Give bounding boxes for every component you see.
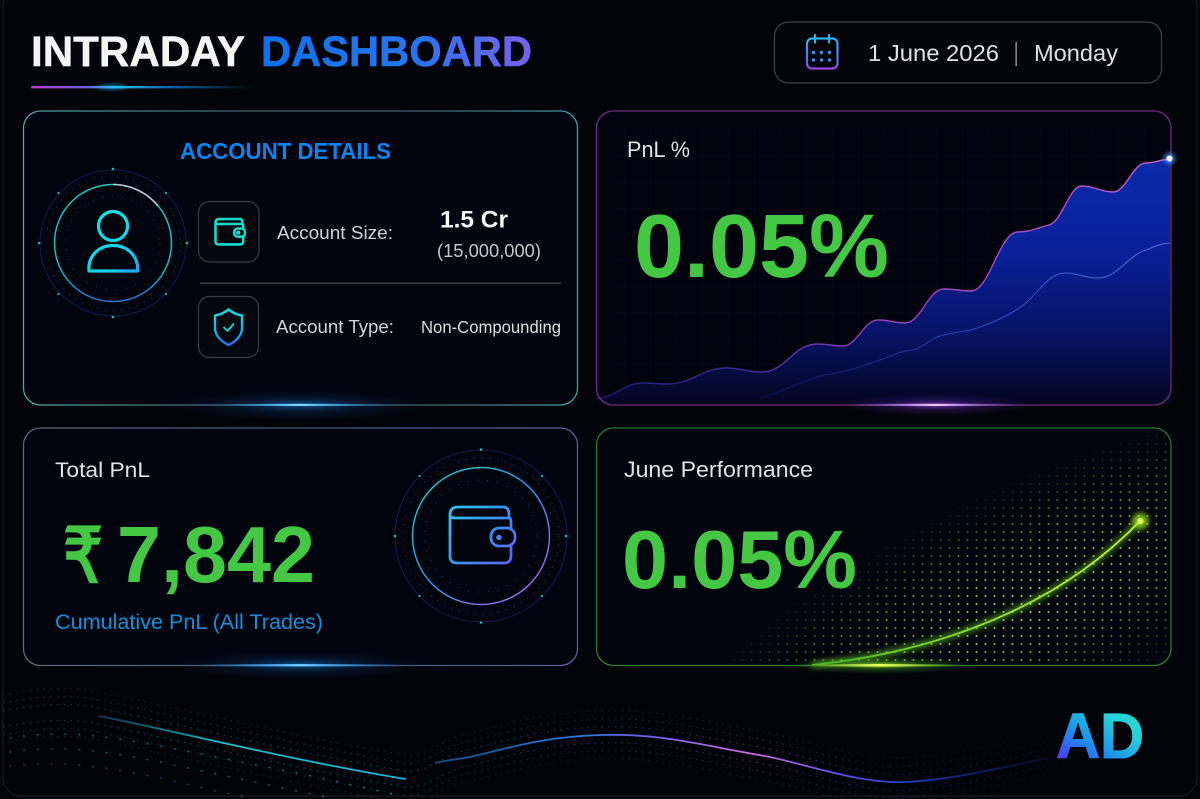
value: account size: 1.5 Cr xyxy=(440,206,508,234)
panel: total PnL xyxy=(24,428,578,679)
heading: ACCOUNT DETAILS xyxy=(180,138,391,164)
chart grid xyxy=(612,125,1158,395)
panel glow xyxy=(790,656,970,674)
value: 0.05% xyxy=(622,513,857,606)
icon: user ring xyxy=(38,168,188,318)
icon: wallet ring xyxy=(394,448,567,624)
title xyxy=(31,28,532,76)
decorative particle wave xyxy=(0,689,1200,799)
dot grid xyxy=(724,428,1166,661)
title: DASHBOARD xyxy=(261,28,532,76)
value: ₹ xyxy=(63,514,103,599)
divider xyxy=(200,282,561,284)
title underline xyxy=(31,84,252,90)
area chart xyxy=(597,159,1171,404)
panel glow xyxy=(841,394,1031,416)
weekday: Monday xyxy=(1034,40,1119,66)
value: 7,842 xyxy=(117,510,315,599)
label: account size: Account Size: xyxy=(277,222,393,243)
date text: 1 June 2026 xyxy=(868,40,999,66)
icon: person xyxy=(89,212,138,271)
chart end point xyxy=(1164,152,1176,164)
date panel xyxy=(774,22,1162,83)
value: account size full: (15,000,000) xyxy=(437,240,541,261)
label: Total PnL xyxy=(55,459,150,482)
panel: PnL percent xyxy=(596,111,1176,416)
separator xyxy=(1016,42,1017,66)
icon: calendar xyxy=(807,35,838,68)
icon tile: wallet xyxy=(198,202,259,262)
panel border xyxy=(596,111,1171,405)
icon: wallet xyxy=(450,507,515,563)
label: June Performance xyxy=(624,457,813,482)
icon tile: shield xyxy=(198,296,258,358)
caption: Cumulative PnL (All Trades) xyxy=(55,611,323,634)
label: account type: Account Type: xyxy=(276,316,394,337)
panel glow xyxy=(175,651,425,679)
panel: account details xyxy=(24,111,578,420)
value: account type: Non-Compounding xyxy=(421,317,561,337)
growth curve xyxy=(812,513,1148,665)
value: 0.05% xyxy=(634,197,889,297)
panel border xyxy=(596,428,1171,666)
panel: June performance xyxy=(596,428,1171,674)
title: INTRADAY xyxy=(31,28,245,76)
panel glow xyxy=(175,390,425,420)
label: PnL % xyxy=(627,137,690,162)
logo: AD xyxy=(1056,700,1144,772)
